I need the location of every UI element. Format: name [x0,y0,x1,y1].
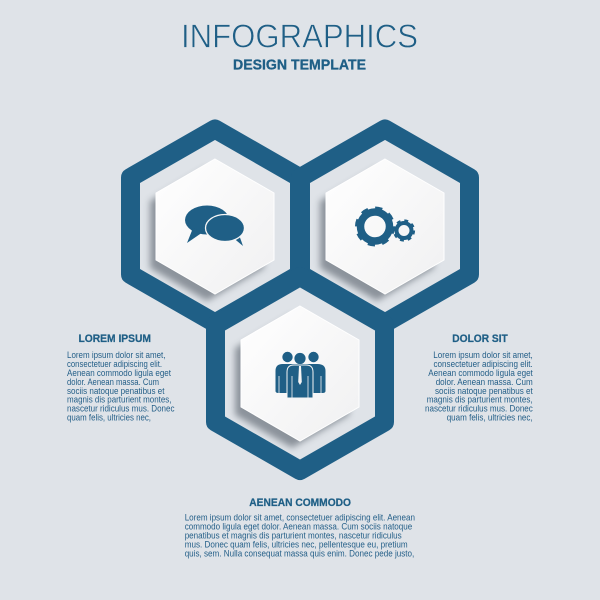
text block: lorem ipsum: LOREM IPSUM [78,333,151,345]
text block: aenean commodo: AENEAN COMMODO [249,497,351,509]
text block: aenean commodo: Lorem ipsum dolor sit amet, consectetuer adipiscing elit. Aenean [185,512,415,522]
text block: aenean commodo: penatibus et magnis dis parturient montes, nascetur ridiculus [185,530,402,540]
title: INFOGRAPHICS [181,18,418,54]
panel: white hexagon chat [156,159,274,294]
text block: aenean commodo [185,497,415,558]
text block: aenean commodo: commodo ligula eget dolor. Aenean massa. Cum sociis natoque [185,522,412,532]
text block: lorem ipsum: nascetur ridiculus mus. Donec [67,404,175,414]
text block: dolor sit: magnis dis parturient montes, [427,394,533,404]
text block: lorem ipsum: Aenean commodo ligula eget [67,368,172,378]
text block: dolor sit: nascetur ridiculus mus. Donec [425,404,533,414]
text block: lorem ipsum: magnis dis parturient montes, [67,394,172,404]
text block: dolor sit: quam felis, ultricies nec, [447,412,533,422]
text block: dolor sit [425,333,533,422]
icon: speech bubbles [185,206,244,246]
text block: lorem ipsum: quam felis, ultricies nec, [67,412,151,422]
panel: white hexagon team [241,306,359,441]
text block: aenean commodo: quis, sem. Nulla consequat massa quis enim. Donec pede justo, [185,548,414,558]
shadows of white hexagons [150,168,434,448]
text block: dolor sit: Aenean commodo ligula eget [428,368,533,378]
honeycomb hexagon frames [130,129,470,470]
subtitle: DESIGN TEMPLATE [233,58,366,74]
icon: team of people [276,352,326,398]
icon: gears [357,208,414,244]
text block: lorem ipsum: Lorem ipsum dolor sit amet, [67,350,166,360]
text block: dolor sit: DOLOR SIT [452,333,508,345]
text block: dolor sit: dolor. Aenean massa. Cum [436,377,533,387]
text block: dolor sit: consectetuer adipiscing elit. [434,359,533,369]
text block: lorem ipsum: dolor. Aenean massa. Cum [67,377,159,387]
text block: dolor sit: sociis natoque penatibus et [435,386,533,396]
text block: lorem ipsum: consectetuer adipiscing elit. [67,359,162,369]
text block: aenean commodo: mus. Donec quam felis, ultricies nec, pellentesque eu, pretium [185,540,408,550]
text block: dolor sit: Lorem ipsum dolor sit amet, [433,350,533,360]
text block: lorem ipsum [67,333,175,422]
text block: lorem ipsum: sociis natoque penatibus et [67,386,165,396]
panel: white hexagon gears [326,159,444,294]
